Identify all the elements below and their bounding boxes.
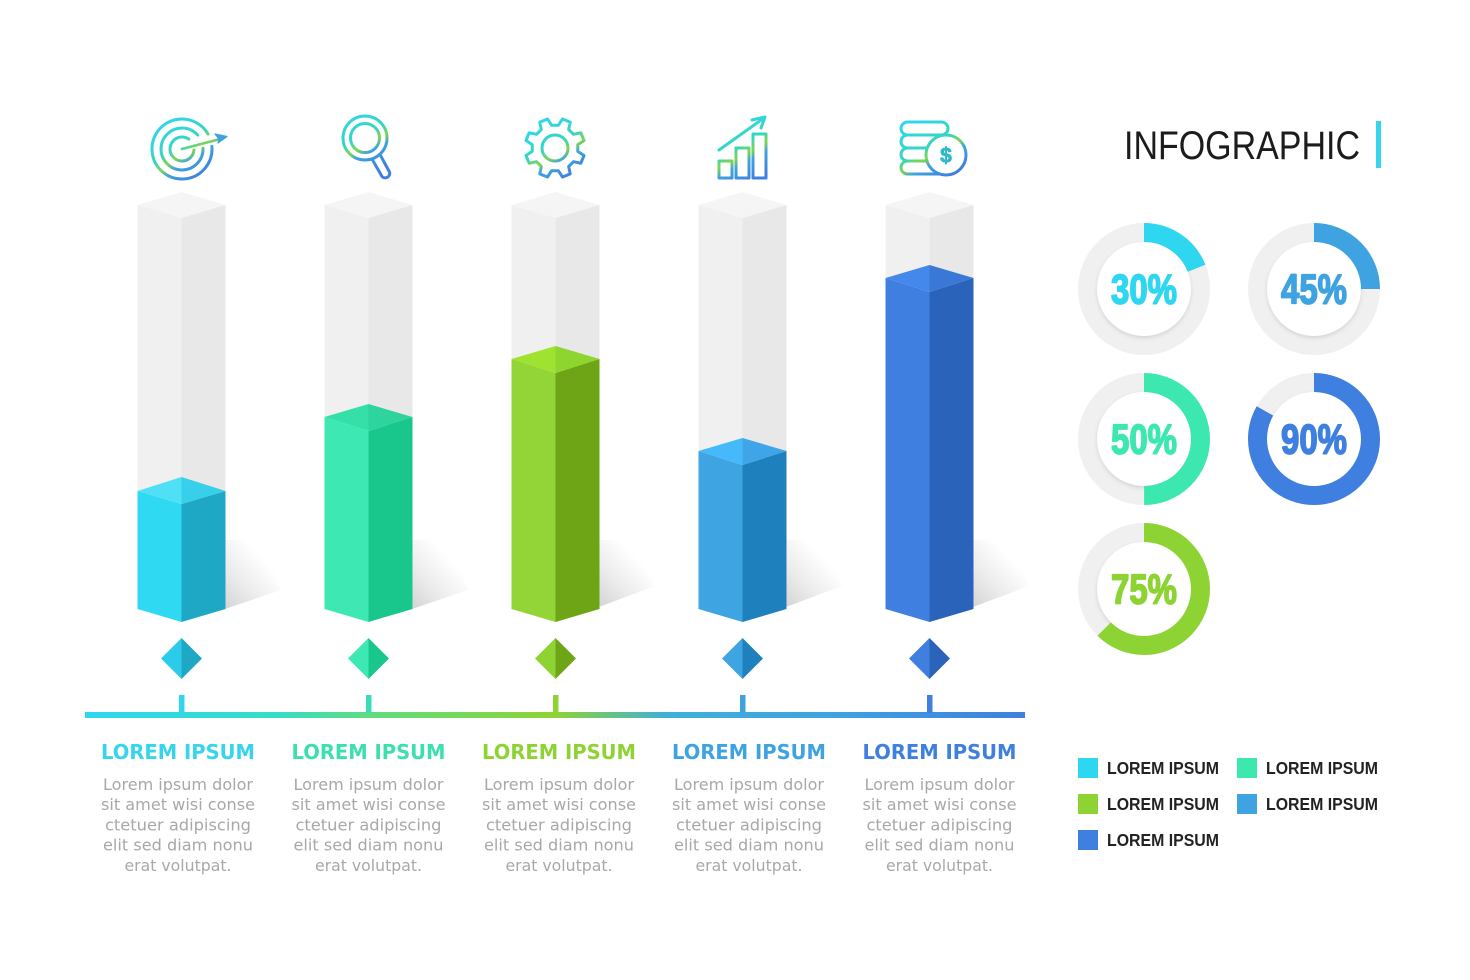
legend xyxy=(1078,758,1378,850)
text block: column 1: elit sed diam nonu xyxy=(103,836,253,854)
text block: column 2 xyxy=(292,740,446,875)
icon: target with dart xyxy=(149,116,227,182)
donut: 90% xyxy=(1258,382,1370,496)
text block: column 4: sit amet wisi conse xyxy=(672,795,826,814)
donut: 30%: 30% xyxy=(1111,266,1177,312)
text block: column 2: erat volutpat. xyxy=(315,856,422,875)
text block: column 5: erat volutpat. xyxy=(886,856,993,875)
text block: column 4: Lorem ipsum dolor xyxy=(674,775,825,794)
legend: LOREM IPSUM xyxy=(1107,794,1219,814)
donut: 45%: 45% xyxy=(1281,266,1347,312)
text block: column 5: LOREM IPSUM xyxy=(862,740,1016,764)
text block: column 1: LOREM IPSUM xyxy=(101,740,255,764)
text block: column 3: elit sed diam nonu xyxy=(484,836,634,854)
donut: 30% xyxy=(1088,232,1200,346)
text block: column 3: LOREM IPSUM xyxy=(482,740,636,764)
donut: 50% xyxy=(1088,382,1200,496)
legend: LOREM IPSUM xyxy=(1266,794,1378,814)
text block: column 1 xyxy=(101,740,255,875)
icon: coin stack with dollar: $ xyxy=(940,144,952,168)
legend: LOREM IPSUM xyxy=(1266,758,1378,778)
icon: gear xyxy=(526,119,584,177)
text block: column 2: elit sed diam nonu xyxy=(294,836,444,854)
text block: column 3: Lorem ipsum dolor xyxy=(484,775,635,794)
text block: column 4: elit sed diam nonu xyxy=(674,836,824,854)
icon: coin stack with dollar xyxy=(901,122,966,175)
text block: column 2: ctetuer adipiscing xyxy=(296,816,442,834)
text block: column 2: Lorem ipsum dolor xyxy=(294,775,444,794)
donut: 75%: 75% xyxy=(1111,566,1177,612)
bar: settings column xyxy=(512,192,655,622)
text block: column 3: sit amet wisi conse xyxy=(482,795,636,814)
text block: column 3 xyxy=(482,740,636,875)
text block: column 1: erat volutpat. xyxy=(124,856,232,875)
text block: column 4 xyxy=(672,740,826,875)
bar: search column xyxy=(324,192,468,622)
text block: column 5 xyxy=(862,740,1016,875)
text block: column 4: LOREM IPSUM xyxy=(672,740,826,764)
text block: column 2: sit amet wisi conse xyxy=(292,795,446,814)
text block: column 4: ctetuer adipiscing xyxy=(676,816,822,834)
donut: 75% xyxy=(1088,532,1200,646)
donut: 45% xyxy=(1258,232,1370,346)
title: INFOGRAPHIC xyxy=(1124,124,1360,168)
donut: 50%: 50% xyxy=(1111,416,1177,462)
icon: magnifying glass xyxy=(343,116,390,178)
text block: column 5: elit sed diam nonu xyxy=(864,836,1014,854)
text block: column 2: LOREM IPSUM xyxy=(292,740,446,764)
panel: 3D bar chart xyxy=(138,192,1029,622)
text block: column 3: ctetuer adipiscing xyxy=(486,816,632,834)
text block: column 5: sit amet wisi conse xyxy=(862,795,1016,814)
text block: column 5: ctetuer adipiscing xyxy=(866,816,1012,834)
text block: column 1: sit amet wisi conse xyxy=(101,795,255,814)
text block: column 1: ctetuer adipiscing xyxy=(105,816,251,834)
text block: column 4: erat volutpat. xyxy=(696,856,802,875)
bar: coins column xyxy=(886,192,1029,622)
timeline with tick marks xyxy=(85,695,1025,718)
diamond markers xyxy=(161,638,950,679)
legend: LOREM IPSUM xyxy=(1107,758,1219,778)
donut: 90%: 90% xyxy=(1281,416,1347,462)
icon: rising bar chart xyxy=(719,117,766,178)
bar: growth column xyxy=(698,192,842,622)
text block: column 1: Lorem ipsum dolor xyxy=(103,775,254,794)
text block: column 3: erat volutpat. xyxy=(506,856,612,875)
text block: column 5: Lorem ipsum dolor xyxy=(864,775,1015,794)
bar: target column xyxy=(138,192,281,622)
legend: LOREM IPSUM xyxy=(1107,830,1219,850)
